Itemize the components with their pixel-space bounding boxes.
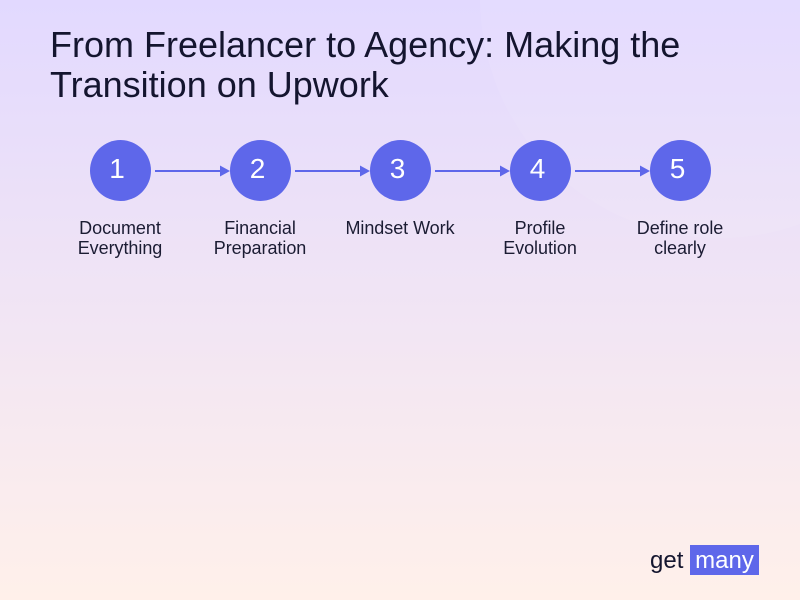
logo: getmany bbox=[650, 545, 759, 575]
label: step 1: Document bbox=[79, 218, 161, 238]
title: From Freelancer to Agency: Making the bbox=[50, 24, 680, 65]
step 5 node: 5 bbox=[670, 153, 685, 184]
logo word: get: get bbox=[650, 547, 683, 574]
decorative background circle bbox=[480, 0, 800, 238]
label: step 4 bbox=[503, 218, 577, 258]
label: step 1: Everything bbox=[78, 238, 162, 258]
step 3 node: 3 bbox=[390, 153, 405, 184]
process flow diagram bbox=[90, 140, 711, 201]
title: Transition on Upwork bbox=[50, 64, 389, 105]
step 4 node bbox=[510, 140, 571, 201]
label: step 5: clearly bbox=[654, 238, 706, 258]
arrow 1 to 2 bbox=[155, 166, 230, 176]
arrow 4 to 5 bbox=[575, 166, 650, 176]
step 2 node: 2 bbox=[250, 153, 265, 184]
label: step 5: Define role bbox=[637, 218, 723, 238]
label: step 5 bbox=[637, 218, 723, 258]
label: step 2: Preparation bbox=[214, 238, 306, 258]
arrow 3 to 4 bbox=[435, 166, 510, 176]
label: step 4: Evolution bbox=[503, 238, 577, 258]
step 1 node: 1 bbox=[109, 153, 125, 184]
label: step 2: Financial bbox=[224, 218, 296, 238]
step 5 node bbox=[650, 140, 711, 201]
label: step 4: Profile bbox=[515, 218, 565, 238]
label: step 3: Mindset Work bbox=[345, 218, 455, 238]
step 4 node: 4 bbox=[530, 153, 545, 184]
label: step 1 bbox=[78, 218, 162, 258]
label: step 2 bbox=[214, 218, 306, 258]
step 3 node bbox=[370, 140, 431, 201]
step 1 node bbox=[90, 140, 151, 201]
logo word: many: many bbox=[695, 547, 754, 574]
title bbox=[50, 24, 680, 105]
arrow 2 to 3 bbox=[295, 166, 370, 176]
step 2 node bbox=[230, 140, 291, 201]
